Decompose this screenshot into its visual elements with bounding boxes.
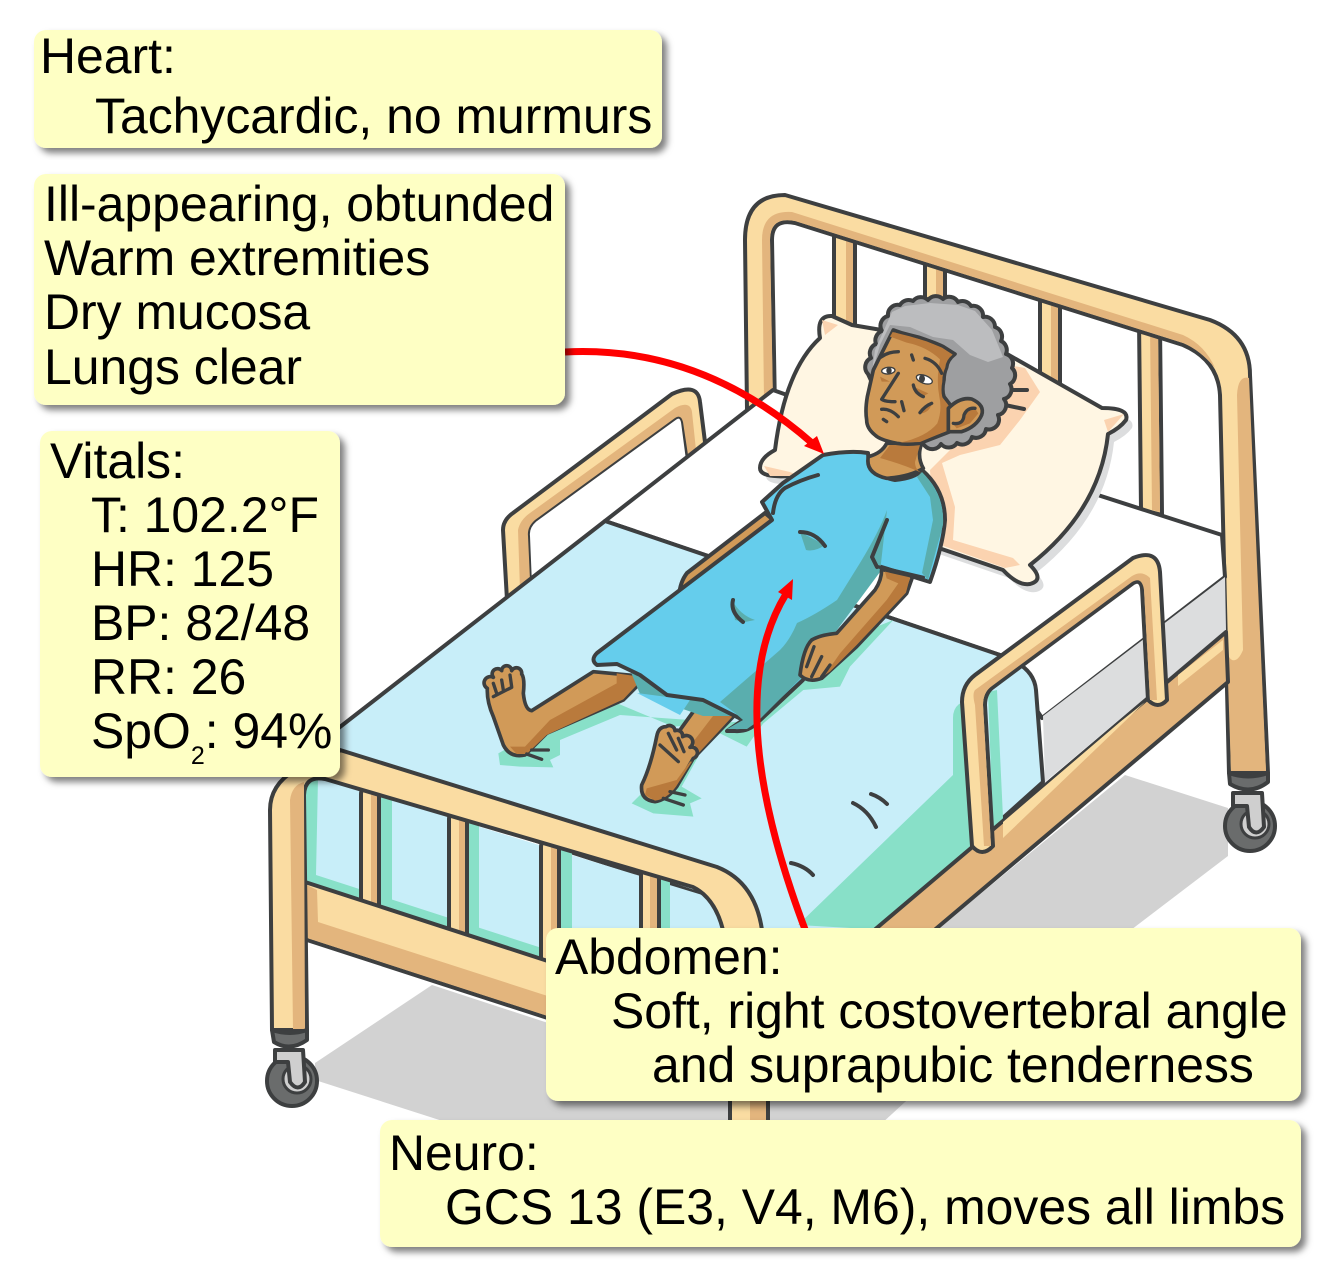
callout: abdomen: Soft, right costovertebral angle	[611, 983, 1288, 1039]
legs and feet	[484, 666, 733, 805]
callout: general appearance: Ill-appearing, obtunded	[44, 176, 554, 232]
left leg and foot	[484, 666, 647, 756]
ear	[948, 399, 982, 432]
gown shading	[720, 472, 943, 729]
hair highlight	[872, 303, 1003, 372]
callout: neuro: Neuro:	[389, 1125, 539, 1181]
patient	[484, 296, 1015, 817]
far side rail	[503, 390, 706, 600]
callout: abdomen	[546, 928, 1301, 1101]
headboard bars	[834, 225, 1162, 515]
callout: general appearance: Dry mucosa	[44, 284, 310, 340]
right post cap	[1229, 773, 1268, 790]
left caster wheel	[267, 1050, 317, 1106]
foot post cap	[272, 1030, 307, 1047]
arrow: abdomen to patient abdomen	[757, 579, 806, 932]
pillow	[760, 316, 1132, 592]
callout: vitals: Vitals:	[50, 433, 185, 489]
callout: vitals: T: 102.2°F	[91, 487, 319, 543]
callout: heart: Heart:	[40, 28, 176, 84]
patient shadow on bed	[498, 620, 893, 817]
callout: vitals: SpO	[91, 703, 191, 759]
callout: heart: Tachycardic, no murmurs	[95, 88, 652, 144]
callout: general appearance: Lungs clear	[44, 339, 302, 395]
pillow shadow	[766, 324, 1132, 592]
callout: neuro: GCS 13 (E3, V4, M6), moves all limbs	[445, 1179, 1285, 1235]
floor shadow	[315, 775, 1228, 1125]
face	[866, 330, 955, 444]
foot end rails	[361, 785, 659, 978]
white bed sheet	[605, 390, 1225, 718]
callout: neuro	[380, 1120, 1301, 1247]
patient gown	[594, 452, 945, 731]
callout: abdomen: Abdomen:	[555, 929, 782, 985]
callout: vitals: 2	[191, 742, 205, 770]
near side rail	[962, 555, 1167, 852]
right caster wheel	[1225, 793, 1275, 851]
callout: vitals: : 94%	[205, 703, 332, 759]
callout: vitals	[40, 431, 340, 777]
right leg	[680, 700, 733, 758]
neck	[868, 443, 923, 478]
foot end of mattress	[303, 778, 740, 1000]
hospital bed mattress cover	[300, 521, 1043, 1000]
callout: vitals: BP: 82/48	[91, 595, 310, 651]
callout: general appearance	[34, 174, 565, 405]
left arm	[679, 513, 785, 596]
bed stand visible below abdomen box	[730, 1095, 768, 1125]
gown lower shade between legs	[630, 670, 737, 716]
hair	[865, 296, 1015, 449]
callout: general appearance: Warm extremities	[44, 230, 430, 286]
head and face	[866, 330, 982, 444]
callout: heart	[34, 28, 662, 148]
headboard of bed	[745, 195, 1268, 773]
callout: abdomen: and suprapubic tenderness	[652, 1037, 1254, 1093]
headboard shading	[762, 212, 1266, 771]
callout: vitals: RR: 26	[91, 649, 246, 705]
mattress wrinkle marks	[791, 794, 887, 875]
callout: vitals: HR: 125	[91, 541, 274, 597]
headboard frame	[745, 195, 1268, 773]
under bed shadow band	[1043, 577, 1226, 782]
gown creases	[732, 475, 887, 622]
near side bed frame rail	[839, 632, 1228, 960]
facial features	[880, 377, 932, 413]
arrow: general findings to patient	[565, 352, 824, 454]
right arm and hand	[800, 567, 923, 680]
foot end lower bar	[305, 882, 560, 1022]
right foot	[641, 726, 697, 802]
foot end frame and post	[270, 750, 762, 1030]
